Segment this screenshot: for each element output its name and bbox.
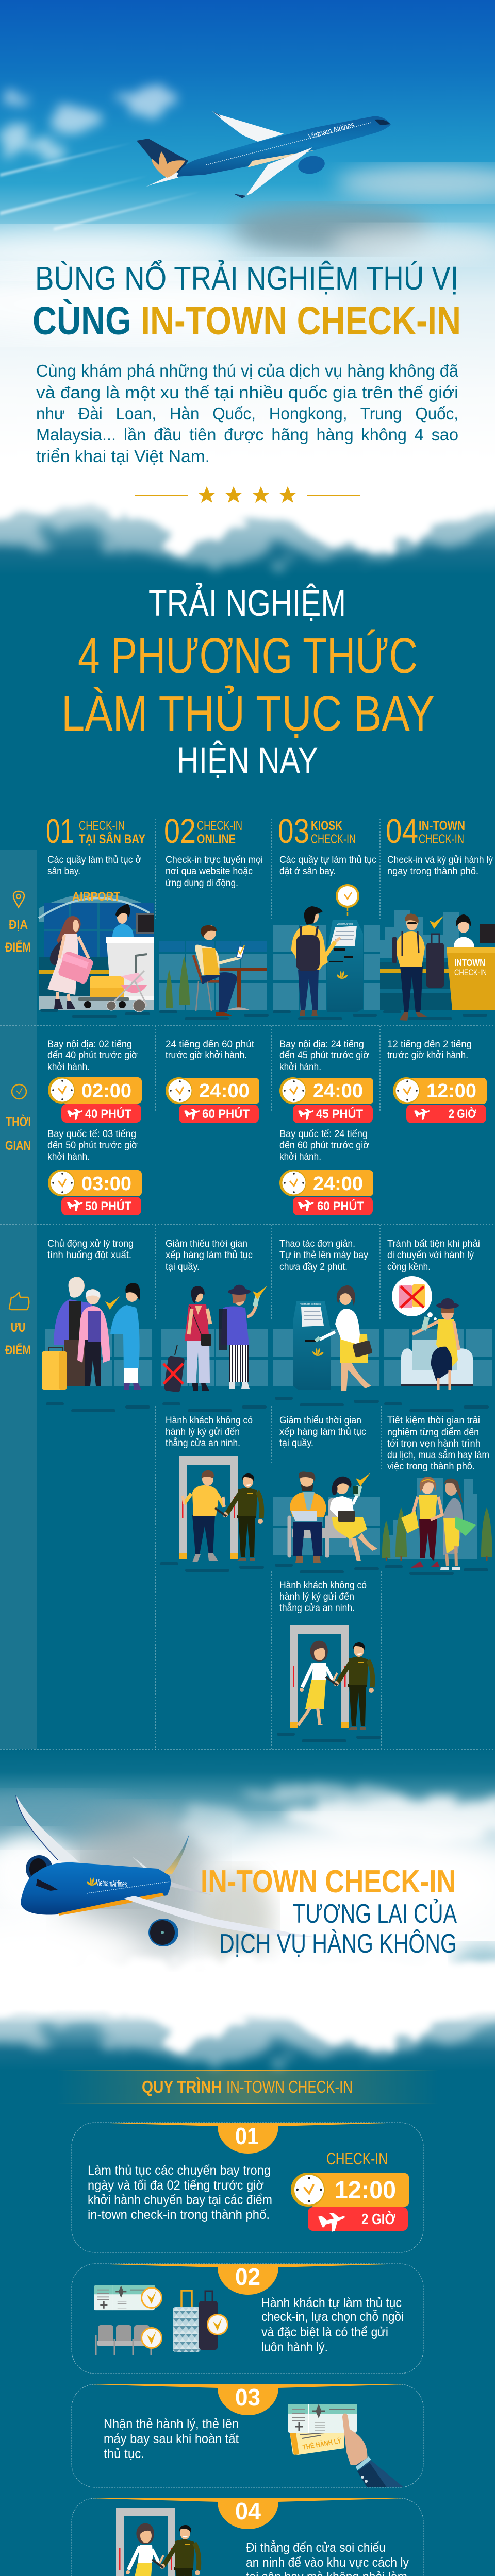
woman with suitcase [47,916,94,1009]
step text: Làm thủ tục các chuyến bay trong [88,2163,271,2178]
method descriptions: location row: nơi qua website hoặc [166,866,253,877]
time row text: Bay quốc tế: 03 tiếng [47,1129,136,1140]
heading band: process: QUY TRÌNH [142,2077,222,2096]
seated woman with briefcase [330,1473,377,1561]
timer: 02:00 / 40 phút [48,1077,142,1123]
illustration: security gate with male passenger [160,1456,264,1572]
column header 02: 02 [164,812,196,851]
time row text: Bay quốc tế: 24 tiếng [279,1129,368,1140]
step text: ngày và tối đa 02 tiếng trước giờ [88,2178,264,2193]
icon: Vietnam Airlines plane front view [16,1795,316,1946]
time row text: khởi hành. [47,1151,90,1162]
title [32,259,461,343]
advantages text: tới trọn vẹn hành trình [387,1438,481,1449]
column header 02 [164,812,242,851]
method descriptions: location row: sân bay. [47,866,80,877]
seats [96,2325,162,2355]
step text [246,2539,409,2576]
step text [88,2163,272,2222]
crossed-out suitcase [163,1345,185,1393]
column header 03: KIOSK [311,819,342,833]
plane livery text: Vietnam Airlines [307,121,355,141]
intro paragraph: và đang là một xu thế tại nhiều quốc gia trên thế giới [36,383,458,402]
process card 01: 01 [235,2123,259,2149]
advantages text: di chuyển với hành lý [387,1250,474,1261]
heading: in-town check-in future [201,1864,457,1959]
time row text: đến 45 phút trước giờ [279,1050,369,1061]
method descriptions: location row: Các quầy làm thủ tục ở [47,855,141,866]
process card 01 [72,2123,423,2252]
left category strip [0,850,37,1749]
column header 04: 04 [386,812,418,851]
advantages text: Hành khách không có [166,1415,253,1426]
column header 02: ONLINE [197,832,236,846]
advantages text: tại quầy. [166,1262,200,1273]
row label: time: GIAN [5,1139,31,1153]
thought bubble: no luggage [392,1276,437,1320]
illustration: woman at kiosk printing pass [273,1285,379,1406]
row label: time: THỜI [6,1114,31,1129]
timer: 24:00 / 60 phút international [279,1170,373,1215]
step text: máy bay sau khi hoàn tất [104,2432,239,2446]
advantages text: Hành khách không có [279,1580,367,1591]
intro paragraph: Cùng khám phá những thú vị của dịch vụ hàng không đã [36,361,459,380]
timer: 24:00 / 45 phút: 45 PHÚT [316,1107,363,1121]
time row text: 24 tiếng đến 60 phút [166,1039,255,1050]
intro paragraph: Malaysia... lần đầu tiên được hãng hàng không 4 sao [36,425,458,444]
time row text: đến 50 phút trước giờ [47,1140,138,1151]
kiosk machine [327,920,363,1012]
boarding pass [94,2285,162,2310]
timer: 24:00 / 45 phút [279,1077,373,1123]
advantages text: Giảm thiểu thời gian [279,1415,361,1426]
step text: Đi thẳng đến cửa soi chiếu [246,2539,386,2555]
step text: thủ tục. [104,2447,144,2461]
man at kiosk [291,906,340,1016]
advantages text: Tự in thẻ lên máy bay [279,1250,368,1261]
counter: INTOWN CHECK-IN [447,947,495,1010]
advantages text: Giảm thiểu thời gian [166,1239,248,1249]
step text: an ninh để vào khu vực cách ly [246,2555,409,2570]
column header 03: 03 [278,812,309,851]
advantages text: tình huống đột xuất. [47,1250,131,1261]
timer: 24:00 / 60 phút international: 60 PHÚT [317,1199,364,1213]
timer: 02:00 / 40 phút: 02:00 [81,1080,131,1102]
time row text: Bay nội địa: 02 tiếng [47,1039,132,1050]
process card 03 [72,2384,423,2487]
advantages text: cồng kềnh. [387,1262,431,1273]
check-in timer: CHECK-IN [326,2149,388,2168]
intro paragraph: triển khai tại Việt Nam. [36,447,210,466]
advantages text: Chủ động xử lý trong [47,1239,134,1249]
step text: Nhận thẻ hành lý, thẻ lên [104,2417,239,2431]
step text: check-in, lựa chọn chỗ ngồi [261,2309,404,2324]
advantages text: thẳng cửa an ninh. [279,1602,355,1614]
traveller [392,913,428,1021]
column header 04 [386,812,465,851]
process card 02 [72,2263,423,2374]
row label: advantages: ƯU [11,1320,25,1335]
method descriptions: location row [47,855,493,889]
column header 01: TẠI SÂN BAY [79,831,145,846]
timer: 24:00 / 60 phút: 24:00 [199,1080,250,1102]
table grid dashes [0,819,495,1750]
time row text: trước giờ khởi hành. [387,1050,468,1061]
illustration: airport counter [39,890,154,1018]
time row text [47,1039,472,1162]
illustration: woman on sofa avoids bulky luggage [384,1276,492,1412]
illustration: elderly couple with agent [42,1277,152,1412]
advantages text [47,1239,489,1614]
heading band: process [57,2070,439,2104]
column header 01: 01 [46,812,74,851]
advantages text: Tránh bất tiện khi phải [387,1239,480,1249]
heading: four check-in methods: TRẢI NGHIỆM [148,583,346,624]
time row text: trước giờ khởi hành. [166,1050,247,1061]
row label: location: ĐIỂM [5,940,31,955]
panel: second cloud band [0,1750,495,2070]
step text: và đặc biệt là có thể gửi [261,2325,388,2340]
security gate [103,2508,207,2576]
column header 04: IN-TOWN [419,819,465,833]
process card 04 [72,2498,423,2576]
time row text: 12 tiếng đến 2 tiếng [387,1039,472,1050]
method descriptions: location row: đặt ở sân bay. [279,866,336,877]
time row text: khởi hành. [279,1151,321,1162]
time row text: đến 60 phút trước giờ [279,1140,369,1151]
timer: 03:00 / 50 phút [48,1170,142,1215]
heading band: process: IN-TOWN CHECK-IN [226,2077,353,2096]
check-in agent [112,904,134,937]
process card 03: 03 [235,2384,260,2411]
process card 04: 04 [235,2498,261,2524]
column header 01: CHECK-IN [79,819,125,833]
heading: four check-in methods: HIỆN NAY [177,740,318,781]
timer: 03:00 / 50 phút: 03:00 [81,1173,131,1195]
luggage and stroller [78,954,147,1012]
timer: 02:00 / 40 phút: 40 PHÚT [85,1107,131,1121]
advantages text: hành lý ký gửi đến [166,1427,240,1437]
row label: location: ĐỊA [9,918,28,932]
timer: 24:00 / 60 phút [166,1077,259,1123]
step text: luôn hành lý. [261,2340,328,2354]
column header 01 [46,812,145,851]
timer: 24:00 / 60 phút: 60 PHÚT [202,1107,250,1121]
row label: advantages [5,1293,31,1358]
illustration: security gate with female passenger [277,1625,381,1742]
step text: Hành khách tự làm thủ tục [261,2296,402,2310]
check-in timer: 2 GIỜ [361,2210,395,2228]
method descriptions: location row: ứng dụng di động. [166,878,238,889]
time row text: Bay nội địa: 24 tiếng [279,1039,364,1050]
time row text: đến 40 phút trước giờ [47,1050,138,1061]
advantages text: du lịch, mua sắm hay làm [387,1449,489,1461]
advantages text: hành lý ký gửi đến [279,1591,354,1602]
step text [261,2296,404,2354]
time row text: khởi hành. [279,1062,321,1073]
suitcases [173,2291,228,2352]
four stars divider [135,486,360,503]
step text: khởi hành chuyến bay tại các điểm [88,2193,272,2207]
advantages text: chưa đầy 2 phút. [279,1262,348,1273]
panel: sky hero background [0,0,495,574]
process card 02: 02 [235,2263,260,2290]
step text: in-town check-in trong thành phố. [88,2208,270,2222]
advantages text: xếp hàng làm thủ tục [166,1250,253,1261]
icon: Vietnam Airlines plane over clouds [137,111,391,198]
illustration: airport counter: AIRPORT [72,890,120,904]
advantages text: tại quầy. [279,1438,314,1449]
clock with pin [336,884,359,917]
column header 03: CHECK-IN [311,832,356,846]
timer: 24:00 / 60 phút international: 24:00 [313,1173,363,1195]
method descriptions: location row: Check-in trực tuyến mọi [166,855,263,866]
row label: location [5,891,31,955]
hand holding boarding pass and luggage tag [288,2404,404,2487]
method descriptions: location row: Các quầy tự làm thủ tục [279,855,376,866]
hand holding boarding pass and luggage tag: THẺ HÀNH LÝ [302,2436,342,2451]
timer: 12:00 / 2 giờ [393,1077,487,1123]
advantages text: nghiệm từng điểm đến [387,1427,479,1438]
check-in timer [291,2149,409,2232]
column header 03 [278,812,356,851]
intro paragraph: như Đài Loan, Hàn Quốc, Hongkong, Trung Quốc, [36,404,458,423]
illustration: two women shopping in the city [382,1477,492,1575]
illustration: woman at kiosk printing pass: Vietnam Airlines [300,1303,321,1306]
advantages text: xếp hàng làm thủ tục [279,1427,366,1437]
illustration: man checking in online at a cafe [159,925,269,1020]
time row text: khởi hành. [47,1062,90,1073]
counter: INTOWN CHECK-IN: INTOWN [454,958,485,968]
column header 02: CHECK-IN [197,819,242,833]
icon: Vietnam Airlines plane front view: VietnamAirlines [96,1877,127,1889]
advantages text: Thao tác đơn giản. [279,1239,355,1249]
illustration: in-town check-in counter [380,910,495,1021]
kiosk machine: Vietnam Airlines [337,923,353,926]
row label: time [5,1084,31,1153]
column header 04: CHECK-IN [419,832,464,846]
method descriptions: location row: ngay trong thành phố. [387,866,478,877]
timer: 12:00 / 2 giờ: 12:00 [426,1080,476,1102]
check-in timer: 12:00 [335,2177,396,2204]
heading: four check-in methods: LÀM THỦ TỤC BAY [61,685,435,741]
illustration: man and woman waiting on seats [273,1471,380,1573]
timer: 03:00 / 50 phút: 50 PHÚT [85,1199,131,1213]
counter desk [106,937,154,996]
advantages text: thẳng cửa an ninh. [166,1437,240,1449]
timer: 24:00 / 45 phút: 24:00 [313,1080,363,1102]
illustration: kiosk self check-in [273,884,380,1020]
seated man with laptop [290,1471,326,1563]
step text [104,2417,239,2461]
advantages text: việc trong thành phố. [387,1461,475,1472]
advantages text: Tiết kiệm thời gian trải [387,1415,480,1426]
heading: four check-in methods [61,583,435,781]
row label: advantages: ĐIỂM [5,1343,31,1358]
illustration: women without checked luggage queue [161,1285,268,1412]
timer: 12:00 / 2 giờ: 2 GIỜ [449,1107,476,1121]
intro paragraph [36,361,459,466]
